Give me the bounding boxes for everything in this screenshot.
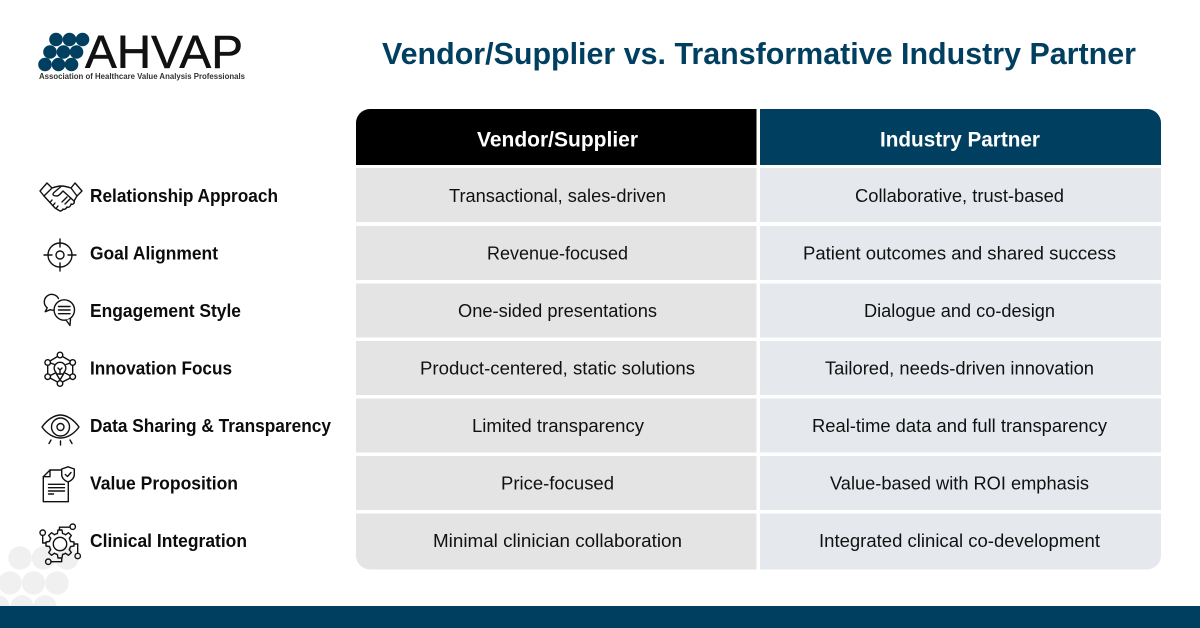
label: Data Sharing & Transparency: Data Sharing & Transparency: [90, 416, 331, 436]
header: Industry Partner: Industry Partner: [880, 128, 1040, 152]
icon: speech bubbles: [44, 294, 74, 326]
label: Engagement Style: Engagement Style: [90, 301, 241, 321]
row: Relationship Approach: Transactional, sales-driven: [449, 186, 666, 206]
row: Goal Alignment: Patient outcomes and shared success: [803, 244, 1116, 264]
footer bar: [0, 606, 1200, 628]
label: Goal Alignment: Goal Alignment: [90, 244, 218, 264]
row: Relationship Approach: Collaborative, trust-based: [855, 186, 1064, 206]
row: Data Sharing & Transparency: [356, 398, 1161, 452]
header: Vendor/Supplier: Vendor/Supplier: [477, 128, 638, 152]
row: Engagement Style: [356, 284, 1161, 338]
row: Engagement Style: Dialogue and co-design: [864, 301, 1055, 321]
icon: document with shield: [43, 467, 74, 502]
icon: innovation network: [45, 352, 75, 386]
label: Clinical Integration: Clinical Integration: [90, 531, 247, 551]
icon: handshake: [40, 183, 82, 211]
label: Value Proposition: Value Proposition: [90, 474, 238, 494]
row: Engagement Style: One-sided presentations: [458, 301, 657, 321]
row: Relationship Approach: [356, 168, 1161, 222]
icon: target: [44, 239, 76, 271]
row: Innovation Focus: Product-centered, static solutions: [420, 358, 695, 378]
logo: AHVAP: [38, 26, 246, 81]
row: Data Sharing & Transparency: Limited transparency: [472, 416, 644, 436]
gear teeth: [46, 530, 74, 558]
row: Innovation Focus: Tailored, needs-driven innovation: [825, 358, 1094, 378]
row labels: [90, 186, 331, 551]
decorative circle pattern: [0, 546, 79, 619]
row: Value Proposition: [356, 456, 1161, 510]
row: Goal Alignment: [356, 226, 1161, 280]
row: Goal Alignment: Revenue-focused: [487, 244, 628, 264]
row: Clinical Integration: [356, 514, 1161, 570]
header: Vendor/Supplier: [356, 109, 756, 165]
row: Innovation Focus: [356, 341, 1161, 395]
icon: eye: [42, 415, 79, 445]
row: Value Proposition: Price-focused: [501, 474, 614, 494]
row: Clinical Integration: Minimal clinician collaboration: [433, 531, 682, 551]
label: Innovation Focus: Innovation Focus: [90, 358, 232, 378]
label: Relationship Approach: Relationship Approach: [90, 186, 278, 206]
row: Value Proposition: Value-based with ROI emphasis: [830, 474, 1089, 494]
row: Data Sharing & Transparency: Real-time data and full transparency: [812, 416, 1107, 436]
icon: gear with nodes: [40, 524, 80, 564]
title: Vendor/Supplier vs. Transformative Industry Partner: [382, 36, 1136, 71]
comparison table: [356, 109, 1161, 570]
logo dots: [38, 33, 89, 71]
logo tagline: Association of Healthcare Value Analysis Professionals: [39, 72, 246, 81]
header: Industry Partner: [760, 109, 1161, 165]
row: Clinical Integration: Integrated clinical co-development: [819, 531, 1100, 551]
logo wordmark: AHVAP: [85, 26, 243, 78]
